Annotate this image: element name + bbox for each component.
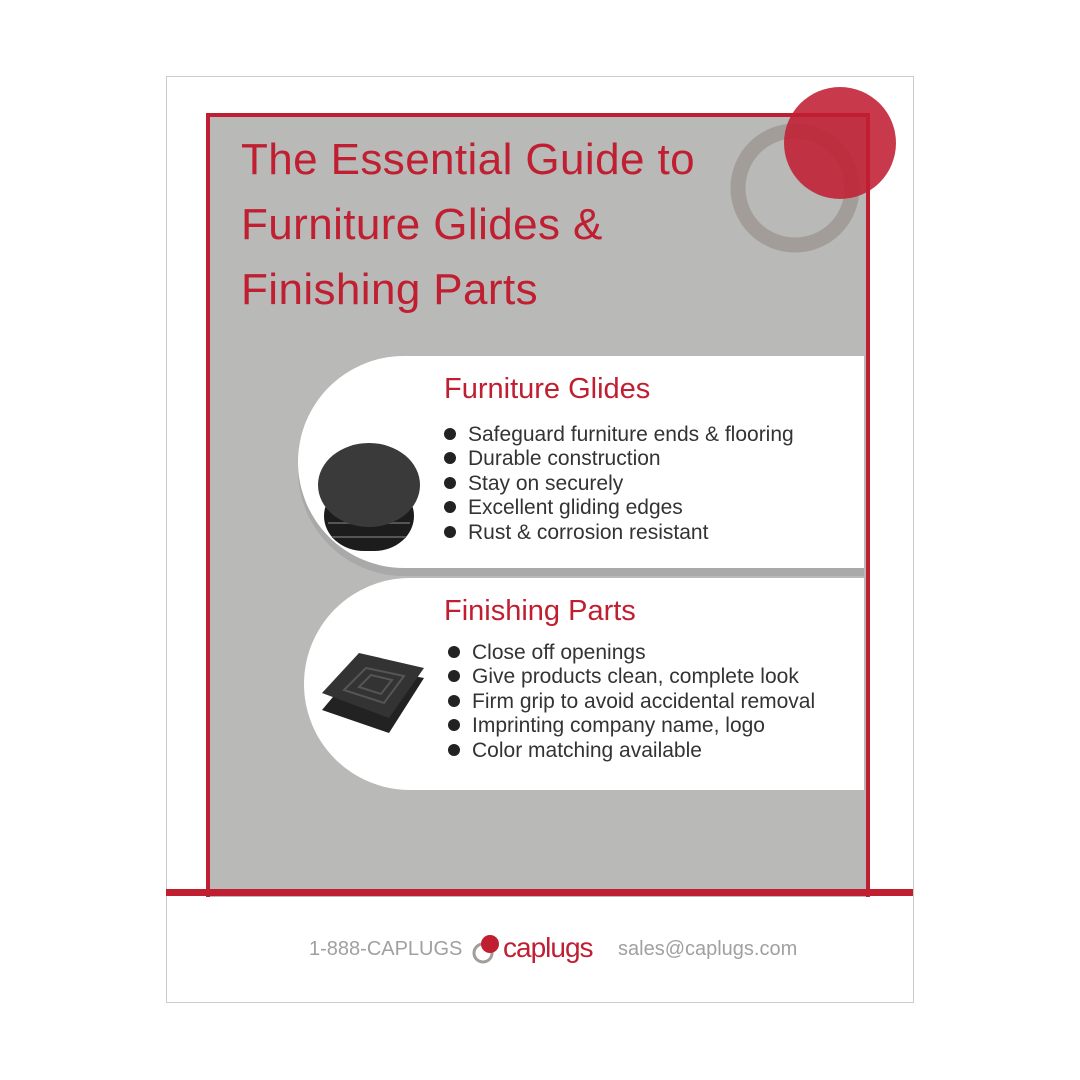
heading: furniture glides: Furniture Glides xyxy=(444,373,650,405)
panel: finishing parts xyxy=(304,578,864,790)
main gray panel xyxy=(206,113,870,897)
list: glides features: Rust & corrosion resistant xyxy=(468,521,708,544)
icon: round glide xyxy=(318,443,420,551)
heading: finishing parts: Finishing Parts xyxy=(444,595,636,627)
decorative circles xyxy=(730,87,896,252)
title: Furniture Glides & xyxy=(241,200,603,249)
icon: square cap xyxy=(322,653,424,733)
list: glides features: Safeguard furniture ends & flooring xyxy=(468,423,794,446)
logo xyxy=(472,935,499,964)
list: finishing features: Close off openings xyxy=(472,641,646,664)
title: The Essential Guide to xyxy=(241,135,695,184)
red base line xyxy=(166,889,913,896)
footer contact: caplugs xyxy=(503,932,593,963)
list: finishing features xyxy=(448,641,815,762)
list: glides features: Stay on securely xyxy=(468,472,623,495)
title xyxy=(241,135,695,314)
list: glides features: Durable construction xyxy=(468,447,661,470)
list: finishing features: Color matching available xyxy=(472,739,702,762)
list: glides features: Excellent gliding edges xyxy=(468,496,683,519)
footer contact: sales@caplugs.com xyxy=(618,938,797,960)
list: finishing features: Firm grip to avoid accidental removal xyxy=(472,690,815,713)
footer contact xyxy=(309,932,797,964)
page frame xyxy=(166,76,914,1003)
list: glides features xyxy=(444,423,794,544)
panel: furniture glides xyxy=(298,356,864,568)
list: finishing features: Give products clean, complete look xyxy=(472,665,799,688)
title: Finishing Parts xyxy=(241,265,538,314)
footer contact: 1-888-CAPLUGS xyxy=(309,938,462,960)
list: finishing features: Imprinting company name, logo xyxy=(472,714,765,737)
